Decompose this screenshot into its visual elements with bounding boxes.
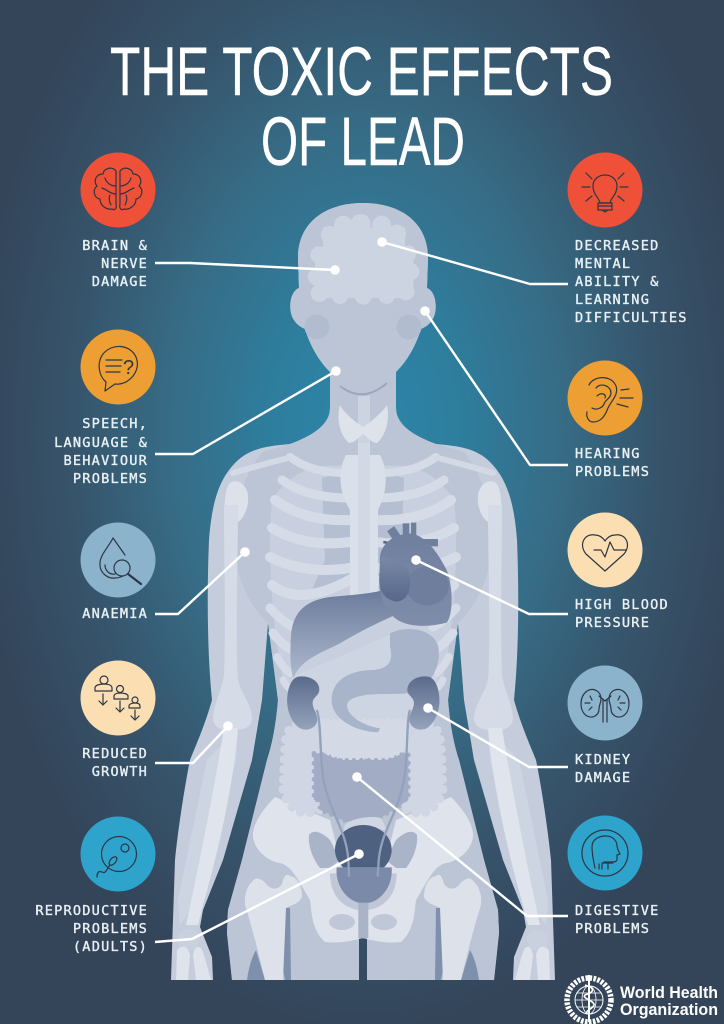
icon: reduced growth figures xyxy=(80,660,156,736)
thyroid xyxy=(338,405,388,443)
label: digestive problems: DIGESTIVE xyxy=(575,903,659,919)
label: high blood pressure xyxy=(575,597,669,631)
label: high blood pressure: PRESSURE xyxy=(575,615,650,631)
label: reduced growth xyxy=(82,746,148,780)
label: reduced growth: GROWTH xyxy=(92,764,148,780)
title xyxy=(110,33,613,180)
transverse colon xyxy=(320,720,408,760)
lower abdomen organs xyxy=(317,760,408,938)
connector: high blood pressure xyxy=(411,555,568,614)
label: hearing problems: PROBLEMS xyxy=(575,464,650,480)
forearm bones xyxy=(178,728,238,925)
connector: speech xyxy=(155,366,341,454)
obturator opening xyxy=(329,914,355,930)
icon: speech bubble xyxy=(80,330,156,404)
label: reproductive problems xyxy=(35,903,148,955)
wordmark: Organization xyxy=(620,1001,718,1019)
label: speech, language and behaviour: LANGUAGE & xyxy=(54,435,148,451)
label: decreased mental ability: LEARNING xyxy=(575,292,650,308)
label: kidney damage xyxy=(575,752,631,786)
label: anaemia: ANAEMIA xyxy=(82,606,148,622)
hand xyxy=(176,929,211,980)
femur xyxy=(245,875,302,980)
small intestine xyxy=(314,753,408,800)
icon: heart with pulse xyxy=(568,512,642,588)
liver xyxy=(290,590,395,678)
human body illustration xyxy=(171,203,555,980)
wordmark xyxy=(620,984,718,1019)
label: reproductive problems: REPRODUCTIVE xyxy=(35,903,148,919)
ribs xyxy=(270,457,353,688)
icon: brain xyxy=(80,152,156,228)
prostate xyxy=(337,867,392,903)
connector: reduced growth xyxy=(155,721,233,763)
cheek xyxy=(304,314,330,340)
label: speech, language and behaviour xyxy=(54,416,148,487)
label: hearing problems xyxy=(575,446,650,480)
large intestine column xyxy=(283,715,325,813)
heart xyxy=(379,523,452,626)
label: decreased mental ability: MENTAL xyxy=(575,256,631,272)
pelvic organ surround xyxy=(330,873,397,910)
label: decreased mental ability xyxy=(575,238,688,326)
icon: light bulb xyxy=(568,152,642,228)
brain xyxy=(308,214,419,305)
label: speech, language and behaviour: BEHAVIOUR xyxy=(64,453,148,469)
right kidney xyxy=(407,676,439,730)
label: brain and nerve damage: BRAIN & xyxy=(82,238,148,254)
logo: World Health Organization xyxy=(567,975,718,1022)
ureters xyxy=(317,710,410,877)
abdomen cavity and organs xyxy=(287,523,452,800)
icon: blood drop and magnifier xyxy=(80,522,156,598)
label: kidney damage: DAMAGE xyxy=(575,770,631,786)
clavicle xyxy=(233,458,288,473)
wordmark: World Health xyxy=(620,984,718,1002)
connector: brain and nerve damage xyxy=(155,263,340,275)
icon: kidneys xyxy=(568,666,642,740)
ribcage backing xyxy=(270,465,363,700)
humerus xyxy=(213,505,252,730)
pelvic inner shading xyxy=(309,832,340,868)
title: OF LEAD xyxy=(261,103,465,180)
lung shading xyxy=(312,470,350,590)
bladder xyxy=(335,825,392,867)
icon: ear xyxy=(568,360,642,436)
icon: speech bubble: ? xyxy=(123,357,134,379)
pelvis wing xyxy=(253,797,363,943)
label: digestive problems: PROBLEMS xyxy=(575,921,650,937)
label: brain and nerve damage: NERVE xyxy=(101,256,148,272)
label: reproductive problems: (ADULTS) xyxy=(73,939,148,955)
label: digestive problems xyxy=(575,903,659,937)
neck and spine xyxy=(358,396,370,596)
label: high blood pressure: HIGH BLOOD xyxy=(575,597,669,613)
label: kidney damage: KIDNEY xyxy=(575,752,631,768)
label: speech, language and behaviour: SPEECH, xyxy=(82,416,148,432)
connector: reproductive xyxy=(155,849,364,942)
icon: head with digestive tract xyxy=(568,816,642,890)
label: hearing problems: HEARING xyxy=(575,446,641,462)
label: decreased mental ability: ABILITY & xyxy=(575,274,659,290)
label: decreased mental ability: DIFFICULTIES xyxy=(575,310,688,326)
femur muscle xyxy=(247,908,291,980)
label: reduced growth: REDUCED xyxy=(82,746,148,762)
connector: decreased mental ability xyxy=(377,237,568,284)
emblem xyxy=(567,975,611,1022)
right half of body (mirror) xyxy=(363,203,555,980)
connector: kidney xyxy=(423,703,568,767)
stomach xyxy=(332,629,439,732)
label: brain and nerve damage: DAMAGE xyxy=(92,274,148,290)
label: reproductive problems: PROBLEMS xyxy=(73,921,148,937)
sternum xyxy=(340,455,386,600)
connector: anaemia xyxy=(155,547,250,614)
shoulder joint xyxy=(225,481,248,522)
lower small intestine xyxy=(317,760,408,822)
icon: egg and sperm xyxy=(80,816,156,892)
left half of body: silhouette, skeleton and limbs xyxy=(171,203,363,980)
connector: digestive xyxy=(352,772,568,916)
label: decreased mental ability: DECREASED xyxy=(575,238,659,254)
rectum pale band xyxy=(343,817,387,832)
label: speech, language and behaviour: PROBLEMS xyxy=(73,471,148,487)
left kidney xyxy=(287,676,319,730)
urethra xyxy=(358,903,368,938)
connector: hearing xyxy=(420,306,568,465)
abdomen pale area xyxy=(293,633,440,740)
label: brain and nerve damage xyxy=(82,238,148,290)
jawline xyxy=(340,383,387,394)
